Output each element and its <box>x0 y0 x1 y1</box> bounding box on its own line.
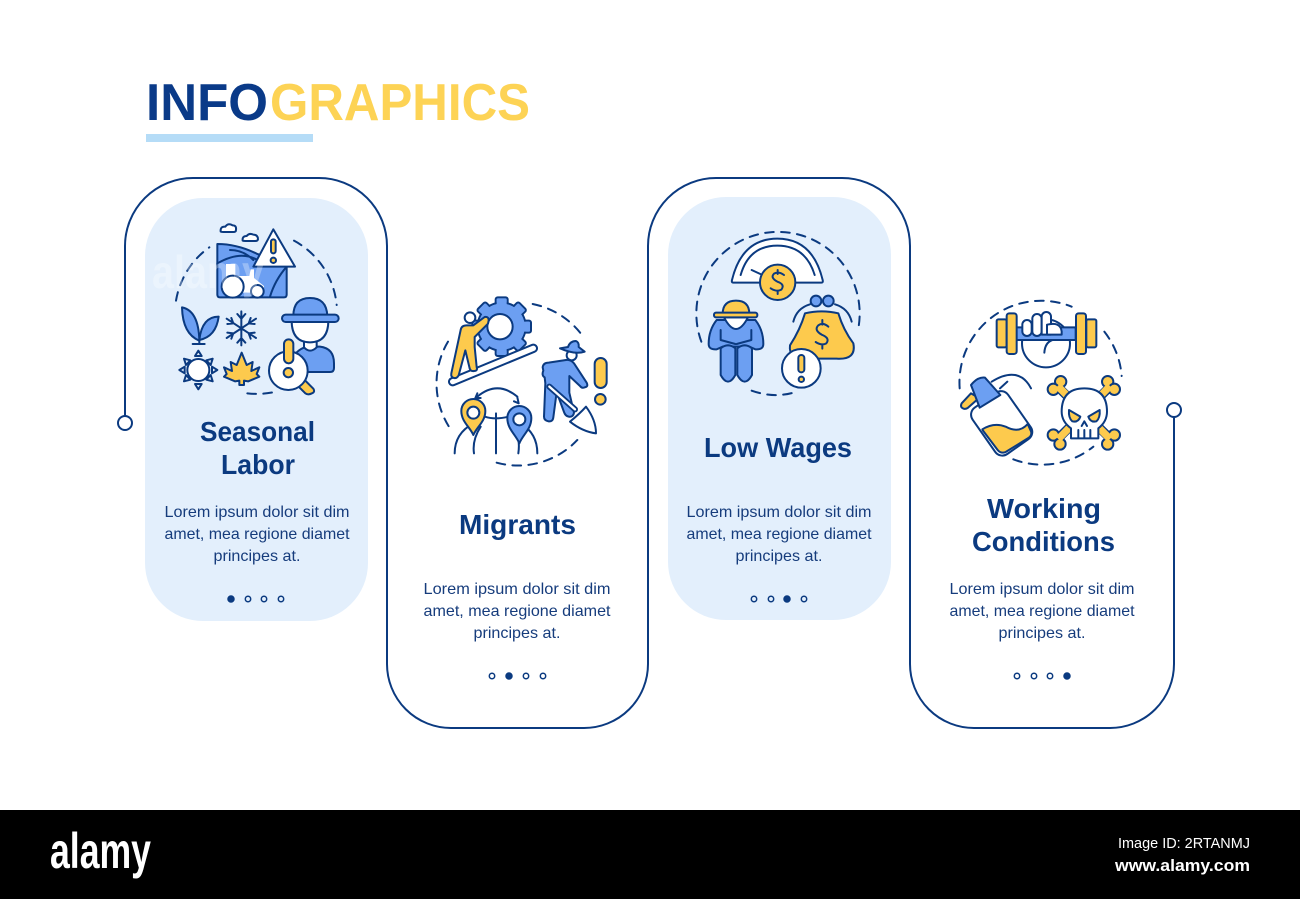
text: working conditions body: Lorem ipsum dolor sit dim <box>950 581 1134 598</box>
heading: working conditions: Working <box>987 493 1101 524</box>
icon: seasonal labor <box>176 224 339 394</box>
panel: low wages background <box>668 197 891 620</box>
pagination dots: step 2 <box>489 673 546 679</box>
text: low wages body: principes at. <box>736 548 822 565</box>
text: working conditions body <box>950 581 1135 642</box>
title <box>146 74 530 132</box>
heading: migrants: Migrants <box>459 509 576 540</box>
icon: low wages <box>696 232 860 395</box>
text: seasonal labor body: Lorem ipsum dolor sit dim <box>164 504 350 521</box>
text: low wages body <box>686 504 872 565</box>
pagination dots: step 3 <box>751 596 807 602</box>
text: working conditions body: amet, mea regione diamet <box>950 603 1135 620</box>
footer bar <box>0 810 1300 899</box>
connecting outline <box>118 178 1181 728</box>
icon: working conditions <box>959 301 1122 465</box>
heading: seasonal labor: Seasonal <box>200 416 315 447</box>
pagination dots: step 1 <box>228 596 284 602</box>
text: seasonal labor body <box>164 504 350 565</box>
pagination dots: step 4 <box>1014 673 1070 679</box>
footer bar: alamy <box>50 823 151 879</box>
footer bar: www.alamy.com <box>1114 856 1250 875</box>
watermark: alamy <box>152 246 264 298</box>
text: migrants body: amet, mea regione diamet <box>424 603 611 620</box>
title underline <box>146 134 313 142</box>
title: INFO <box>146 74 268 132</box>
text: seasonal labor body: principes at. <box>214 548 300 565</box>
text: migrants body: Lorem ipsum dolor sit dim <box>424 581 610 598</box>
icon: migrants <box>437 297 607 466</box>
text: working conditions body: principes at. <box>998 625 1086 642</box>
heading: working conditions <box>972 493 1115 557</box>
heading: low wages: Low Wages <box>704 432 852 463</box>
title: GRAPHICS <box>270 74 530 132</box>
text: low wages body: Lorem ipsum dolor sit dim <box>686 504 872 521</box>
text: seasonal labor body: amet, mea regione diamet <box>164 526 350 543</box>
footer bar: Image ID: 2RTANMJ <box>1118 835 1250 852</box>
text: low wages body: amet, mea regione diamet <box>686 526 872 543</box>
panel: seasonal labor background <box>145 198 368 621</box>
heading: seasonal labor <box>200 416 315 480</box>
heading: seasonal labor: Labor <box>221 449 295 480</box>
text: migrants body <box>424 581 611 642</box>
heading: working conditions: Conditions <box>972 526 1115 557</box>
text: migrants body: principes at. <box>474 625 560 642</box>
